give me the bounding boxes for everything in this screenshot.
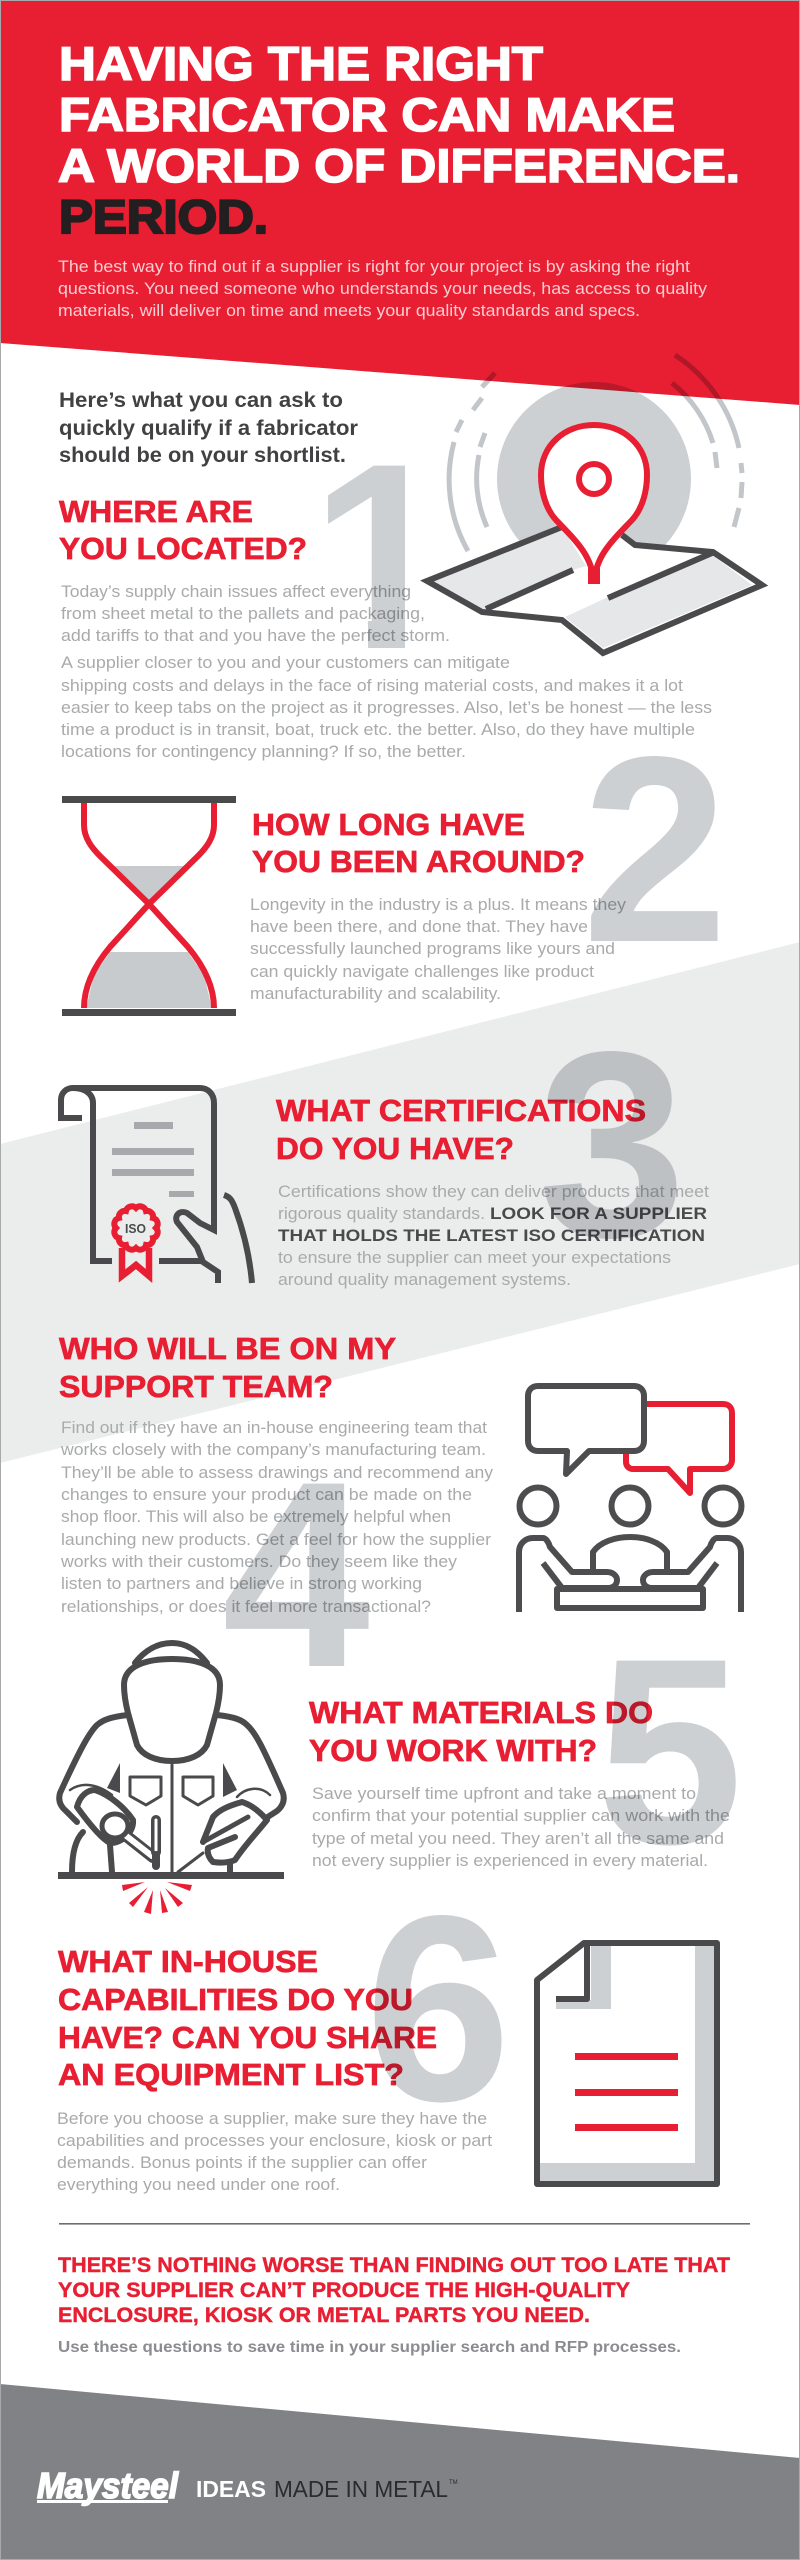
section 6 heading: AN EQUIPMENT LIST? bbox=[58, 2057, 404, 2092]
section 3 heading bbox=[276, 1093, 646, 1166]
section 4 body: They’ll be able to assess drawings and recommend any bbox=[61, 1463, 494, 1482]
section 5 heading: WHAT MATERIALS DO bbox=[309, 1695, 653, 1730]
section 2 heading bbox=[252, 807, 585, 879]
logo: Maysteel: Maysteel bbox=[37, 2465, 179, 2506]
section 3 body: to ensure the supplier can meet your expectations bbox=[278, 1248, 671, 1267]
section 4 body: works closely with the company’s manufacturing team. bbox=[60, 1440, 486, 1459]
section 5 body: Save yourself time upfront and take a moment to bbox=[312, 1784, 696, 1803]
number 3: 3 bbox=[538, 997, 686, 1293]
intro paragraph: materials, will deliver on time and meets your quality standards and specs. bbox=[58, 301, 640, 320]
section 1 body: add tariffs to that and you have the perfect storm. bbox=[61, 626, 450, 645]
section 6 heading: HAVE? CAN YOU SHARE bbox=[58, 2020, 437, 2055]
section 3 body: around quality management systems. bbox=[278, 1270, 571, 1289]
subheading: qualify question: Here’s what you can ask to bbox=[59, 389, 343, 412]
intro paragraph bbox=[58, 257, 708, 320]
section 2 body: can quickly navigate challenges like product bbox=[250, 962, 594, 981]
section 3 body: rigorous quality standards. bbox=[278, 1204, 485, 1223]
section 3 heading: DO YOU HAVE? bbox=[276, 1131, 514, 1166]
section 4 heading bbox=[59, 1331, 396, 1404]
tagline: IDEAS bbox=[196, 2476, 266, 2502]
closing statement: THERE’S NOTHING WORSE THAN FINDING OUT TOO LATE THAT bbox=[58, 2254, 730, 2277]
section 4 body: listen to partners and believe in strong working bbox=[61, 1574, 422, 1593]
section 3 heading: WHAT CERTIFICATIONS bbox=[276, 1093, 646, 1128]
section 2 body: Longevity in the industry is a plus. It means they bbox=[250, 895, 627, 914]
section 2 body: have been there, and done that. They have bbox=[250, 917, 588, 936]
intro paragraph: The best way to find out if a supplier is right for your project is by asking the right bbox=[58, 257, 690, 276]
number 5: 5 bbox=[597, 1604, 743, 1900]
tagline bbox=[196, 2476, 458, 2502]
section 4 heading: WHO WILL BE ON MY bbox=[59, 1331, 396, 1366]
section 5 heading: YOU WORK WITH? bbox=[309, 1733, 597, 1768]
icon: document bbox=[537, 1942, 717, 2185]
panel: grey footer bbox=[0, 2384, 800, 2560]
closing statement: YOUR SUPPLIER CAN’T PRODUCE THE HIGH-QUALITY bbox=[58, 2279, 630, 2302]
subheading: qualify question bbox=[59, 389, 358, 467]
section 4 body: relationships, or does it feel more transactional? bbox=[61, 1597, 431, 1616]
tagline: TM bbox=[449, 2480, 458, 2486]
section 6 heading: WHAT IN-HOUSE bbox=[58, 1944, 318, 1979]
section 1 body: shipping costs and delays in the face of rising material costs, and makes it a lot bbox=[61, 676, 683, 695]
icon: certificate with ISO seal bbox=[61, 1088, 252, 1283]
section 2 heading: HOW LONG HAVE bbox=[252, 807, 525, 842]
section 2 heading: YOU BEEN AROUND? bbox=[252, 844, 585, 879]
section 6 body: Before you choose a supplier, make sure they have the bbox=[57, 2109, 487, 2128]
title bbox=[58, 37, 740, 243]
icon: location disc and signal arcs bbox=[449, 355, 742, 576]
divider bbox=[59, 2223, 750, 2225]
number 4: 4 bbox=[222, 1427, 372, 1723]
section 6 body bbox=[57, 2109, 492, 2194]
section 4 body: works with their customers. Do they seem like they bbox=[60, 1552, 458, 1571]
closing statement bbox=[58, 2254, 730, 2327]
number 1: 1 bbox=[310, 409, 457, 705]
number 6: 6 bbox=[365, 1861, 511, 2157]
section 5 body bbox=[312, 1784, 730, 1870]
section 3 body: Certifications show they can deliver products that meet bbox=[278, 1182, 709, 1201]
icon: support team meeting bbox=[519, 1386, 742, 1612]
icon: welder bbox=[58, 1643, 284, 1879]
panel: red header banner bbox=[0, 0, 800, 405]
section 5 body: confirm that your potential supplier can work with the bbox=[312, 1806, 730, 1825]
section 6 heading bbox=[58, 1944, 437, 2092]
title: PERIOD. bbox=[59, 190, 268, 243]
section 1 heading: WHERE ARE bbox=[59, 494, 253, 529]
section 5 body: not every supplier is experienced in every material. bbox=[312, 1851, 708, 1870]
section 1 body: time a product is in transit, boat, truck etc. the better. Also, do they have multiple bbox=[61, 720, 695, 739]
section 4 body: changes to ensure your product can be made on the bbox=[61, 1485, 472, 1504]
section 4 heading: SUPPORT TEAM? bbox=[59, 1369, 333, 1404]
icon: hourglass bbox=[62, 796, 236, 1016]
subheading: qualify question: quickly qualify if a fabricator bbox=[59, 417, 358, 440]
section 3 body: LOOK FOR A SUPPLIER bbox=[490, 1204, 707, 1223]
section 1 heading: YOU LOCATED? bbox=[59, 531, 307, 566]
section 5 body: type of metal you need. They aren’t all the same and bbox=[312, 1829, 724, 1848]
section 4 body bbox=[60, 1418, 494, 1616]
title: FABRICATOR CAN MAKE bbox=[59, 88, 675, 141]
icon: location pin bbox=[541, 425, 647, 584]
section 5 heading bbox=[309, 1695, 653, 1768]
subheading: qualify question: should be on your shortlist. bbox=[59, 444, 346, 467]
section 1 heading bbox=[59, 494, 307, 566]
section 4 body: Find out if they have an in-house engineering team that bbox=[61, 1418, 487, 1437]
section 2 body bbox=[250, 895, 627, 1003]
icon: folded map bbox=[427, 527, 762, 653]
section 2 body: manufacturability and scalability. bbox=[250, 984, 501, 1003]
section 6 body: capabilities and processes your enclosure, kiosk or part bbox=[57, 2131, 492, 2150]
icon: certificate with ISO seal: ISO bbox=[125, 1221, 146, 1236]
section 3 body bbox=[278, 1182, 709, 1289]
intro paragraph: questions. You need someone who understands your needs, has access to quality bbox=[58, 279, 708, 298]
section 2 body: successfully launched programs like yours and bbox=[250, 939, 615, 958]
section 1 body: A supplier closer to you and your customers can mitigate bbox=[61, 653, 510, 672]
closing statement: ENCLOSURE, KIOSK OR METAL PARTS YOU NEED. bbox=[58, 2304, 590, 2327]
tagline: MADE IN METAL bbox=[274, 2476, 448, 2502]
section 1 body: Today’s supply chain issues affect everything bbox=[61, 582, 411, 601]
title: HAVING THE RIGHT bbox=[59, 37, 543, 90]
panel: diagonal grey band bbox=[0, 942, 800, 1463]
section 1 body: locations for contingency planning? If so, the better. bbox=[61, 742, 466, 761]
icon: red weld sparks bbox=[122, 1882, 192, 1914]
section 3 body: THAT HOLDS THE LATEST ISO CERTIFICATION bbox=[278, 1226, 705, 1245]
closing note: Use these questions to save time in your supplier search and RFP processes. bbox=[58, 2339, 681, 2356]
number 2: 2 bbox=[582, 702, 728, 998]
section 1 body bbox=[61, 582, 712, 761]
section 1 body: easier to keep tabs on the project as it progresses. Also, let’s be honest — the less bbox=[61, 698, 712, 717]
section 6 body: everything you need under one roof. bbox=[57, 2175, 340, 2194]
section 4 body: shop floor. This will also be extremely helpful when bbox=[61, 1507, 451, 1526]
section 6 heading: CAPABILITIES DO YOU bbox=[58, 1982, 413, 2017]
section 1 body: from sheet metal to the pallets and packaging, bbox=[61, 604, 425, 623]
section 4 body: launching new products. Get a feel for how the supplier bbox=[61, 1530, 491, 1549]
section 6 body: demands. Bonus points if the supplier can offer bbox=[57, 2153, 427, 2172]
title: A WORLD OF DIFFERENCE. bbox=[58, 139, 740, 192]
